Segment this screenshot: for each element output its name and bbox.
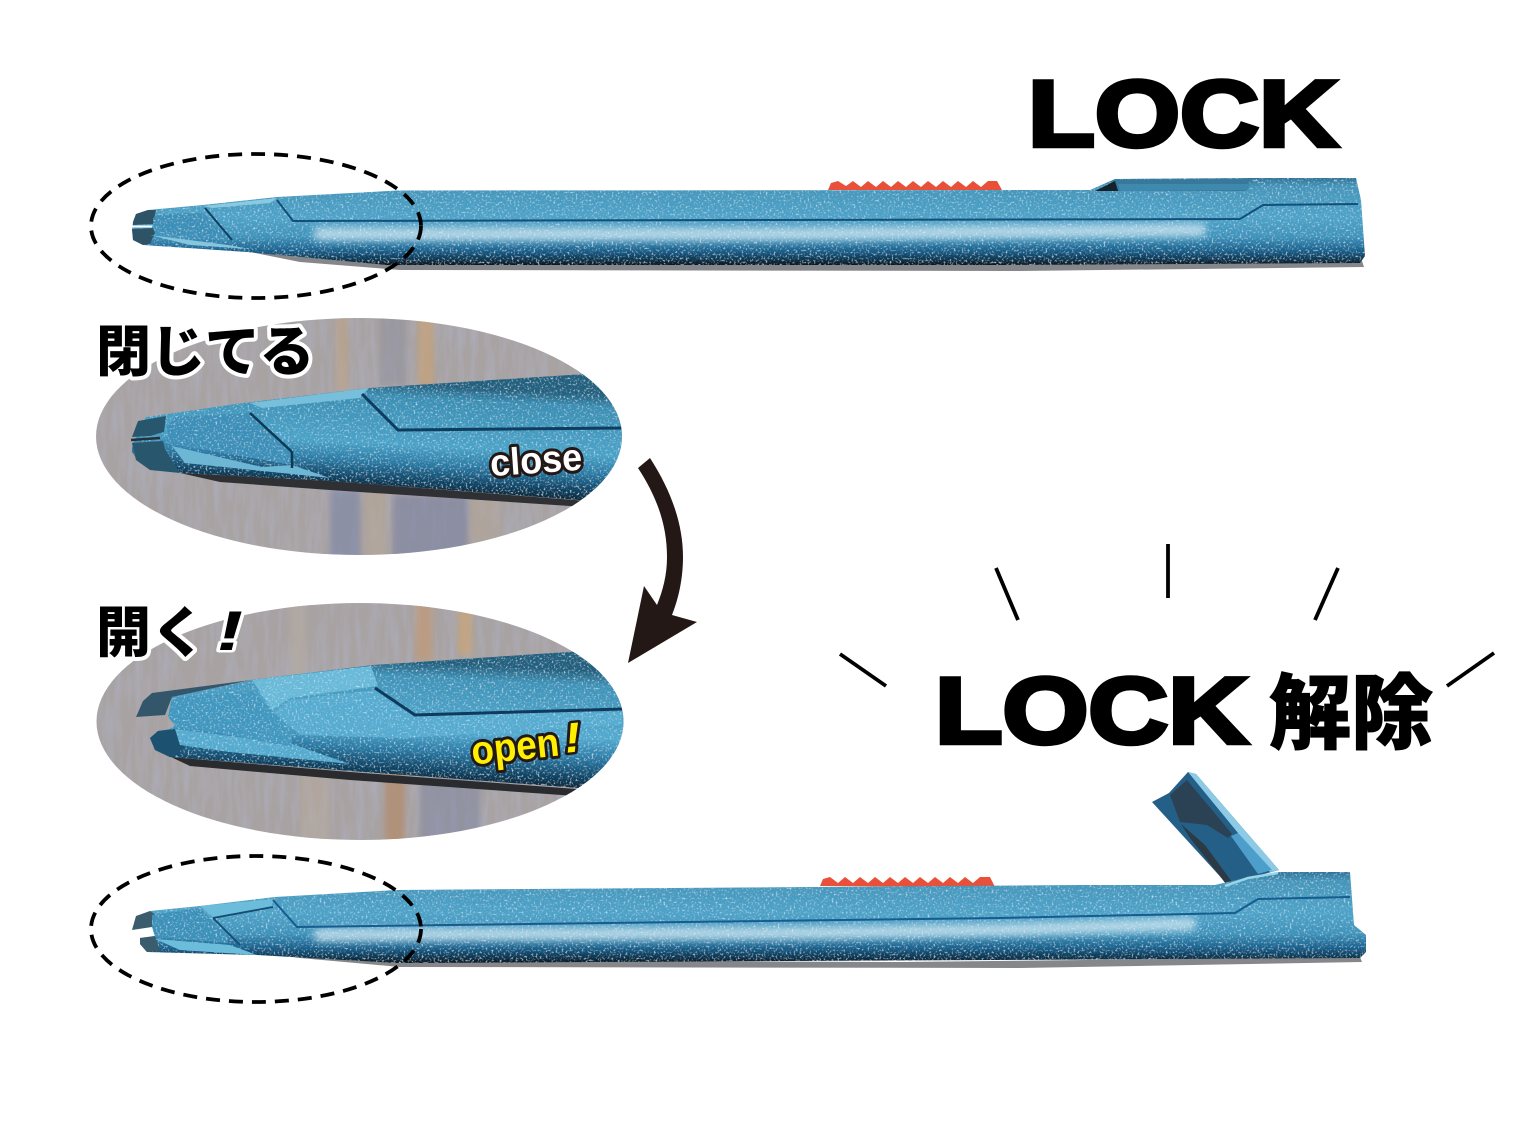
slot bbox=[131, 438, 160, 440]
lower jaw strip bbox=[155, 939, 257, 955]
wood background bbox=[90, 315, 630, 560]
blue body bbox=[132, 178, 1365, 265]
heading: LOCK 解除: 解除 bbox=[1269, 669, 1433, 760]
label: 開く！ bbox=[96, 600, 252, 664]
arrow: close to open bbox=[628, 458, 697, 663]
seam lines bbox=[277, 200, 1358, 221]
metal tip bbox=[132, 416, 180, 473]
lower jaw light strip bbox=[175, 729, 350, 764]
slot bbox=[132, 226, 152, 228]
red slider teeth bbox=[820, 877, 995, 887]
pen close-up closed bbox=[132, 374, 630, 512]
label: close: close bbox=[489, 437, 583, 485]
wood background bbox=[90, 600, 630, 845]
light top strip bbox=[252, 666, 378, 710]
light upper piece bbox=[200, 899, 273, 917]
light top strip bbox=[203, 198, 277, 208]
front jaw segment bbox=[168, 691, 292, 747]
front jaw segment bbox=[152, 908, 228, 943]
dashed circle: locked tip bbox=[91, 154, 421, 298]
seam lines bbox=[273, 897, 1350, 927]
heading: LOCK 解除 bbox=[935, 658, 1433, 763]
pen: locked (closed tip, clip down) bbox=[132, 178, 1365, 271]
emphasis rays bbox=[840, 544, 1494, 686]
front jaw segment bbox=[166, 413, 292, 465]
label: 開く！: 開く bbox=[96, 602, 206, 664]
blue body bbox=[140, 872, 1366, 963]
front jaw segment bbox=[153, 213, 228, 242]
metal tip bbox=[132, 911, 160, 952]
red slider teeth bbox=[828, 181, 1002, 190]
label: 開く！: ! bbox=[209, 600, 252, 662]
inner chevron bbox=[275, 690, 622, 738]
dark underside bbox=[180, 473, 600, 508]
label: 開く photo panel bbox=[90, 600, 630, 845]
grey underside strip bbox=[240, 950, 1362, 968]
dashed circle: unlocked tip bbox=[91, 856, 421, 1002]
grey underside strip bbox=[250, 252, 1364, 271]
label: open!: open bbox=[469, 721, 561, 774]
heading: LOCK: LOCK bbox=[1028, 61, 1338, 166]
metal tip bbox=[136, 680, 251, 717]
pen: unlocked (open tip, clip raised) bbox=[132, 772, 1366, 968]
lower jaw tip bbox=[150, 729, 185, 757]
lower dark base bbox=[167, 756, 576, 796]
clip slab bbox=[1098, 179, 1250, 191]
heading: LOCK 解除: LOCK bbox=[935, 658, 1248, 763]
white highlight band bbox=[320, 924, 1190, 935]
white highlight band bbox=[320, 230, 1200, 234]
tip nose bbox=[132, 210, 156, 245]
label: 閉じてる photo panel bbox=[90, 315, 630, 560]
light top strip bbox=[250, 388, 369, 408]
label: open!: ! bbox=[562, 713, 584, 762]
pen close-up open: main body bbox=[150, 652, 624, 788]
seam bbox=[362, 394, 622, 430]
raised clip bbox=[1152, 772, 1279, 884]
seam bbox=[375, 688, 622, 715]
label: 閉じてる: 閉じてる bbox=[96, 321, 314, 383]
light lower strip bbox=[150, 235, 250, 249]
